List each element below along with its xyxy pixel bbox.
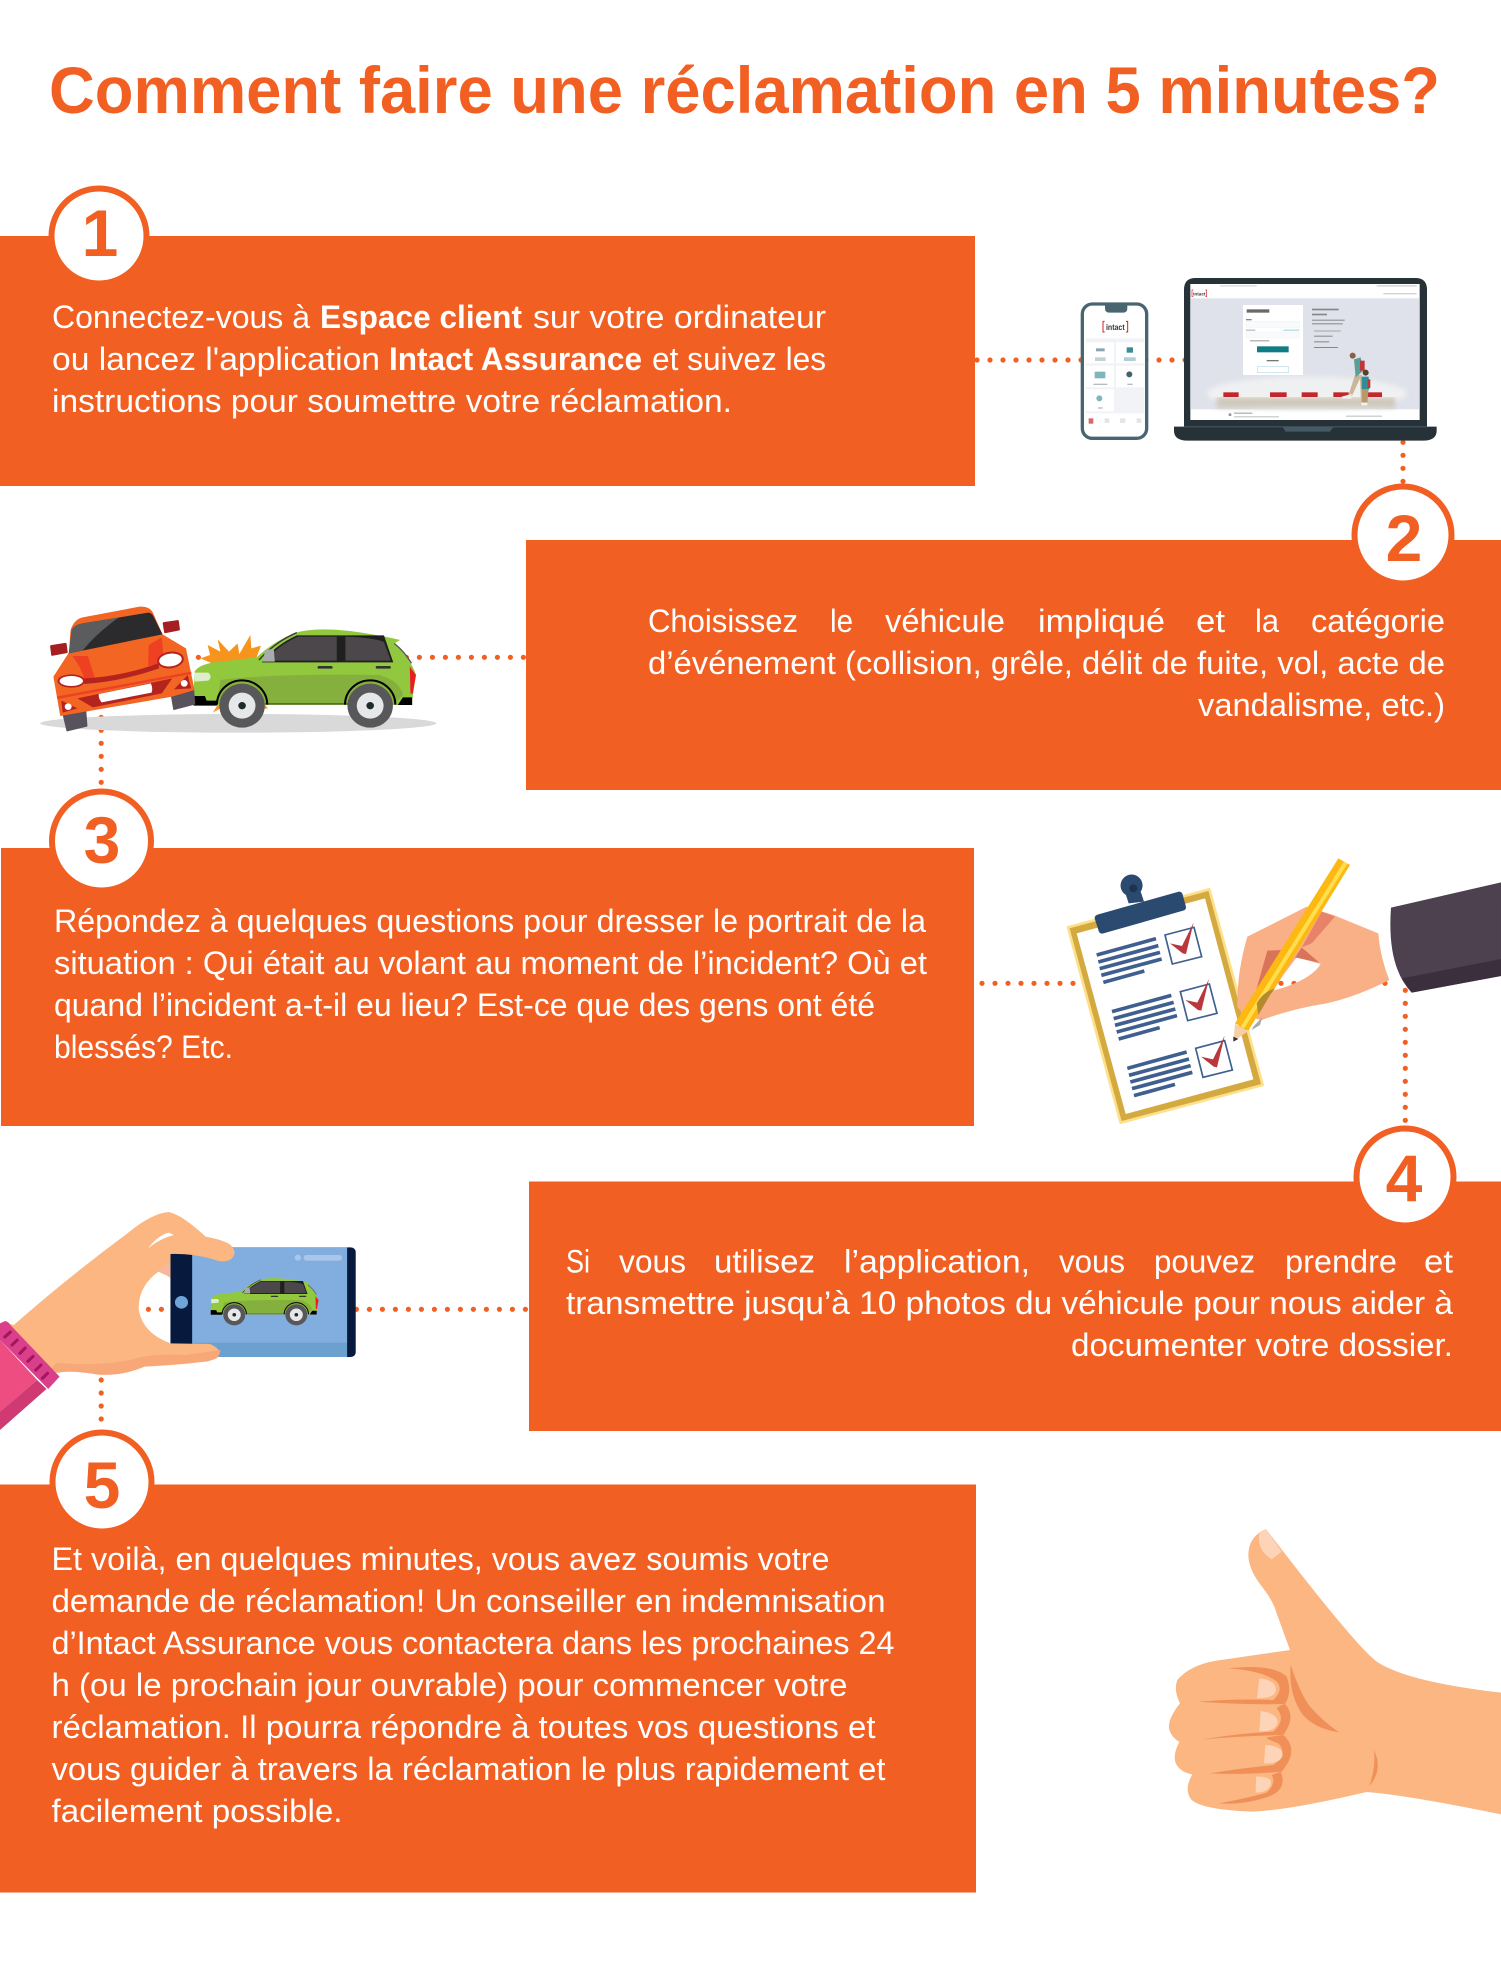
title: Comment faire une réclamation en 5 minutes? <box>49 53 1440 127</box>
text: step 1: sur votre ordinateur <box>533 299 826 335</box>
text: step 3: Répondez à quelques questions pour dresser le portrait de la <box>54 903 926 939</box>
badge: number 3: 3 <box>84 803 120 877</box>
text: step 4: pouvez <box>1154 1244 1255 1280</box>
text: step 5: vous guider à travers la réclamation le plus rapidement et <box>52 1751 886 1787</box>
phone <box>170 1247 356 1357</box>
text: step 5: réclamation. Il pourra répondre à toutes vos questions et <box>52 1709 876 1745</box>
text: step 2: véhicule <box>885 603 1005 639</box>
badge: number 1: 1 <box>82 196 118 270</box>
text: step 1: instructions pour soumettre votre réclamation. <box>52 383 732 419</box>
panel: step 3 <box>1 792 974 1126</box>
connector: phone to step 4, hand to step 5 <box>101 1309 526 1420</box>
text: step 5: Et voilà, en quelques minutes, vous avez soumis votre <box>52 1541 830 1577</box>
text: step 3: situation : Qui était au volant au moment de l’incident? Où et <box>54 945 927 981</box>
connector: step 1 to laptop <box>977 360 1403 482</box>
text: step 3 <box>54 903 927 1065</box>
icon: clipboard and writing hand <box>1068 858 1501 1123</box>
panel: step 1 <box>0 188 975 486</box>
icon: laptop <box>1174 278 1437 441</box>
explosion <box>200 635 268 713</box>
badge: number 5 <box>52 1432 152 1532</box>
connector: step 3 to hand <box>982 983 1405 1121</box>
text: step 4: vous <box>619 1244 686 1280</box>
icon: phone and laptop <box>1082 278 1437 441</box>
text: step 4: prendre <box>1285 1244 1397 1280</box>
connector: step 2 to cars, cars to step 3 <box>101 657 525 783</box>
text: step 2: Choisissez <box>648 603 798 639</box>
clipboard <box>1068 875 1263 1123</box>
text: step 4: transmettre jusqu’à 10 photos du véhicule pour nous aider à <box>566 1285 1453 1321</box>
panel: step 2 <box>526 486 1501 790</box>
sleeve <box>0 1321 60 1430</box>
text: step 2: le <box>830 603 853 639</box>
pencil <box>1233 858 1350 1042</box>
badge: number 2 <box>1354 486 1452 584</box>
text: step 1: Intact Assurance <box>389 341 642 377</box>
text: step 5: facilement possible. <box>52 1793 342 1829</box>
text: step 3: quand l’incident a-t-il eu lieu? Est-ce que des gens ont été <box>54 987 875 1023</box>
text: step 5 <box>52 1541 894 1829</box>
text: step 4: et <box>1424 1244 1453 1280</box>
panel: step 5 <box>0 1432 976 1892</box>
text: step 5: h (ou le prochain jour ouvrable) pour commencer votre <box>52 1667 848 1703</box>
text: step 5: d’Intact Assurance vous contactera dans les prochaines 24 <box>52 1625 894 1661</box>
hand <box>9 1212 235 1375</box>
text: step 2: catégorie <box>1311 603 1445 639</box>
text: step 4 <box>566 1244 1453 1363</box>
text: step 2: vandalisme, etc.) <box>1198 687 1445 723</box>
icon: phone: intact <box>1106 322 1125 332</box>
badge: number 1 <box>52 188 146 284</box>
sleeve <box>1390 882 1501 993</box>
text: step 4: vous <box>1059 1244 1125 1280</box>
red car <box>51 607 195 731</box>
badge: number 2: 2 <box>1386 501 1422 575</box>
icon: thumbs up <box>1169 1529 1501 1814</box>
text: step 4: Si <box>566 1244 590 1280</box>
badge: number 3 <box>52 792 151 890</box>
panel: step 4 <box>529 1128 1501 1431</box>
badge: number 4: 4 <box>1386 1141 1423 1215</box>
green car <box>194 629 416 728</box>
icon: car collision <box>40 607 436 733</box>
text: step 4: l’application, <box>844 1244 1030 1280</box>
text: step 1: ou lancez l'application <box>52 341 380 377</box>
text: step 3: blessés? Etc. <box>54 1029 233 1065</box>
text: step 1: Espace client <box>320 299 522 335</box>
icon: hand holding phone <box>0 1212 356 1430</box>
text: step 1 <box>52 299 826 419</box>
text: step 4: utilisez <box>714 1244 815 1280</box>
hand <box>1237 907 1389 1030</box>
text: step 1: et suivez les <box>652 341 826 377</box>
text: step 2: impliqué <box>1038 603 1165 639</box>
badge: number 4 <box>1356 1128 1454 1226</box>
text: step 4: documenter votre dossier. <box>1071 1327 1453 1363</box>
icon: walking people <box>1342 353 1370 405</box>
text: step 2: d’événement (collision, grêle, délit de fuite, vol, acte de <box>648 645 1445 681</box>
text: step 2 <box>648 603 1445 723</box>
badge: number 5: 5 <box>84 1448 120 1522</box>
text: step 1: Connectez-vous à <box>52 299 310 335</box>
icon: phone <box>1082 304 1147 438</box>
icon: laptop: intact <box>1193 291 1206 296</box>
text: step 5: demande de réclamation! Un conseiller en indemnisation <box>52 1583 886 1619</box>
shadow <box>40 714 436 733</box>
text: step 2: la <box>1255 603 1279 639</box>
small green car <box>211 1278 319 1325</box>
text: step 2: et <box>1196 603 1225 639</box>
